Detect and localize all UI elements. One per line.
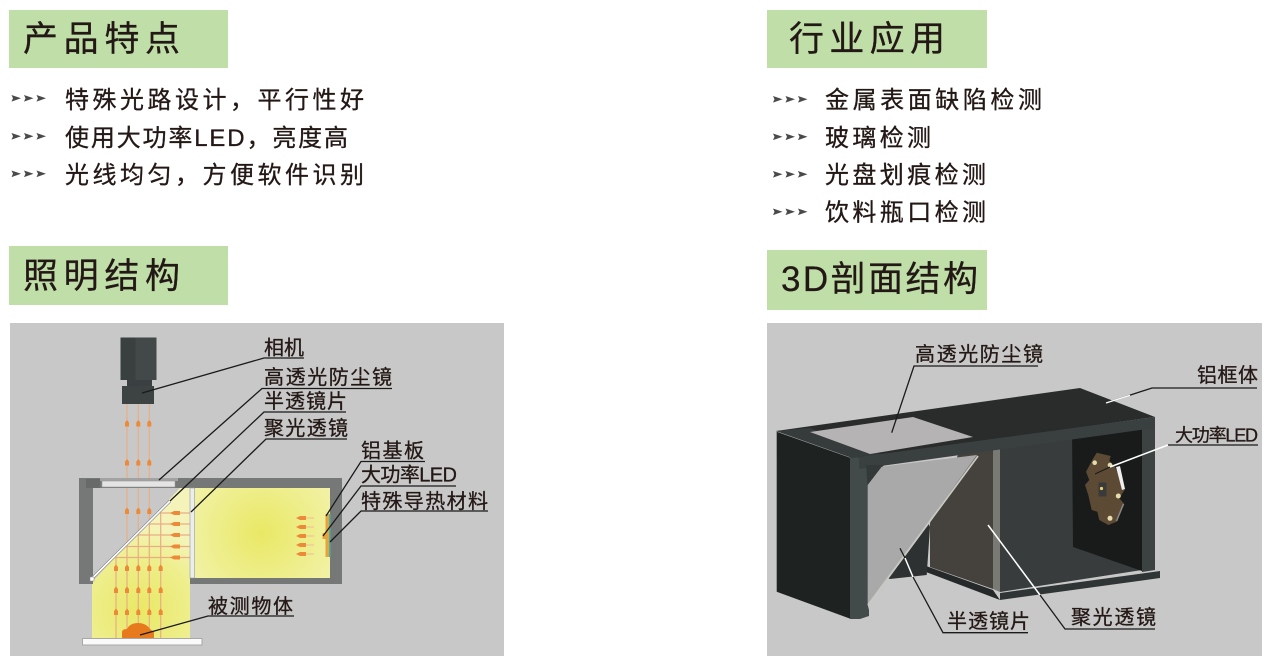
label: 聚光透镜 xyxy=(988,525,1156,629)
lens edge xyxy=(993,444,1000,592)
application 2: 玻璃检测 xyxy=(825,125,931,152)
housing xyxy=(79,478,342,584)
half mirror edge xyxy=(868,456,978,605)
left black face xyxy=(777,432,851,619)
inner brown wall xyxy=(930,445,993,589)
inner back wall xyxy=(1000,420,1142,592)
object plate xyxy=(82,638,202,645)
panel: 3D cross-section diagram xyxy=(767,323,1262,656)
label: 特殊导热材料: 特殊导热材料 xyxy=(361,490,488,513)
label: 高透光防尘镜: 高透光防尘镜 xyxy=(264,366,392,389)
label: 高透光防尘镜 xyxy=(892,343,1043,433)
list: industry applications xyxy=(773,87,1042,226)
label: 被测物体 xyxy=(140,595,294,635)
bottom rail xyxy=(1000,571,1160,600)
feature 2: 使用大功率LED，亮度高 xyxy=(65,125,348,152)
label: 特殊导热材料 xyxy=(330,490,488,542)
label: 铝基板 xyxy=(326,440,425,516)
label: 半透镜片: 半透镜片 xyxy=(947,610,1030,633)
inspected object xyxy=(122,623,154,638)
label: 高透光防尘镜 xyxy=(159,366,392,480)
label: 相机 xyxy=(142,336,304,393)
black rear panel xyxy=(1072,420,1142,571)
mirror shadow xyxy=(866,465,884,488)
yellow light: beam xyxy=(92,488,190,638)
dust-proof glass xyxy=(86,478,178,488)
label: 铝框体 xyxy=(1106,364,1258,403)
label: 半透镜片 xyxy=(900,548,1030,633)
heading: 照明结构: 照明结构 xyxy=(23,257,180,296)
dust-proof glass top xyxy=(810,417,973,454)
application 2 xyxy=(773,125,931,152)
heading: 产品特点 xyxy=(9,10,228,68)
heading: 行业应用: 行业应用 xyxy=(789,20,945,59)
heading: 照明结构 xyxy=(9,246,228,305)
LED and aluminium board xyxy=(322,514,330,557)
heading: 产品特点: 产品特点 xyxy=(23,20,180,59)
list: product features xyxy=(12,87,364,189)
top left rim xyxy=(776,428,880,458)
application 3: 光盘划痕检测 xyxy=(825,162,986,189)
heading: 行业应用 xyxy=(767,10,987,68)
label: 大功率LED: 大功率LED xyxy=(361,464,457,486)
label: 聚光透镜: 聚光透镜 xyxy=(264,417,348,440)
rays xyxy=(116,404,314,638)
label: 聚光透镜 xyxy=(191,417,348,512)
application 1: 金属表面缺陷检测 xyxy=(825,87,1042,114)
heading: 3D剖面结构: 3D剖面结构 xyxy=(781,260,978,299)
yellow light: right chamber xyxy=(194,488,330,578)
application 4: 饮料瓶口检测 xyxy=(825,200,986,226)
focusing lens xyxy=(190,488,194,578)
feature 3: 光线均匀，方便软件识别 xyxy=(65,162,364,189)
3D housing xyxy=(776,388,1160,619)
label: 半透镜片 xyxy=(170,390,347,501)
icon: camera xyxy=(120,338,156,404)
half mirror xyxy=(90,501,170,581)
label: 大功率LED: 大功率LED xyxy=(1175,426,1258,446)
LED star board xyxy=(1085,453,1125,525)
lower rail xyxy=(926,566,1000,600)
label: 大功率LED xyxy=(1095,426,1258,474)
label: 大功率LED xyxy=(323,464,457,536)
feature 1: 特殊光路设计，平行性好 xyxy=(65,87,364,114)
right post xyxy=(1142,417,1155,572)
heading: 3D剖面结构 xyxy=(767,250,987,310)
dark lower triangle xyxy=(880,515,930,579)
label: 被测物体: 被测物体 xyxy=(208,595,293,618)
front top beam xyxy=(859,417,1155,469)
label: 铝框体: 铝框体 xyxy=(1197,364,1258,387)
label: 铝基板: 铝基板 xyxy=(361,440,424,462)
label: 相机: 相机 xyxy=(264,336,304,360)
top surface xyxy=(776,388,1155,458)
front post xyxy=(850,456,869,619)
half mirror face xyxy=(868,455,977,606)
label: 高透光防尘镜: 高透光防尘镜 xyxy=(915,343,1043,366)
panel: lighting structure diagram xyxy=(10,323,504,656)
ray arrowheads xyxy=(114,420,306,615)
label: 聚光透镜: 聚光透镜 xyxy=(1071,606,1156,629)
label: 半透镜片: 半透镜片 xyxy=(264,390,347,413)
